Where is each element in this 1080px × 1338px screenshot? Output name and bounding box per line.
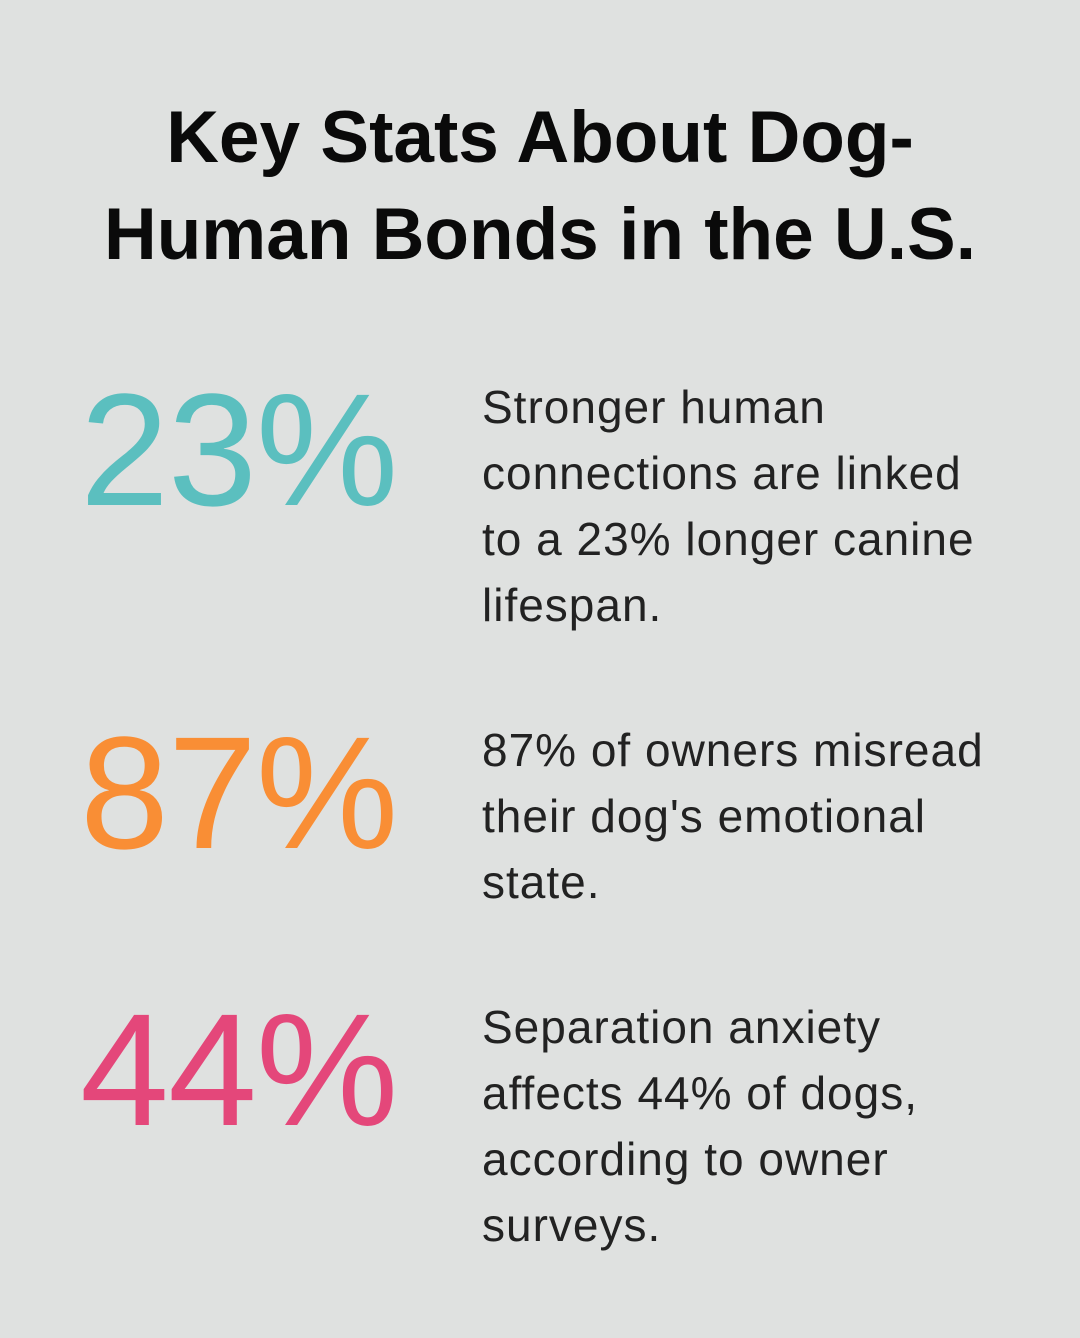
text: 23% description: lifespan. [482,579,662,631]
text: 87% description: their dog's emotional [482,790,926,842]
text: 44% description [482,1001,918,1251]
text: 87% description: state. [482,856,601,908]
text: 44% description: according to owner [482,1133,889,1185]
stat: 44%: 44% [80,980,397,1159]
text: 23% description: to a 23% longer canine [482,513,975,565]
text: 87% description: 87% of owners misread [482,724,984,776]
text: 23% description [482,381,975,631]
text: 44% description: Separation anxiety [482,1001,881,1053]
text: 87% description [482,724,984,908]
text: 23% description: connections are linked [482,447,962,499]
text: 44% description: surveys. [482,1199,661,1251]
title: Key Stats About Dog- [166,97,914,178]
title [104,97,976,275]
stat: 23%: 23% [80,360,397,539]
text: 23% description: Stronger human [482,381,826,433]
text: 44% description: affects 44% of dogs, [482,1067,918,1119]
title: Human Bonds in the U.S. [104,194,976,275]
stat: 87%: 87% [80,703,397,882]
